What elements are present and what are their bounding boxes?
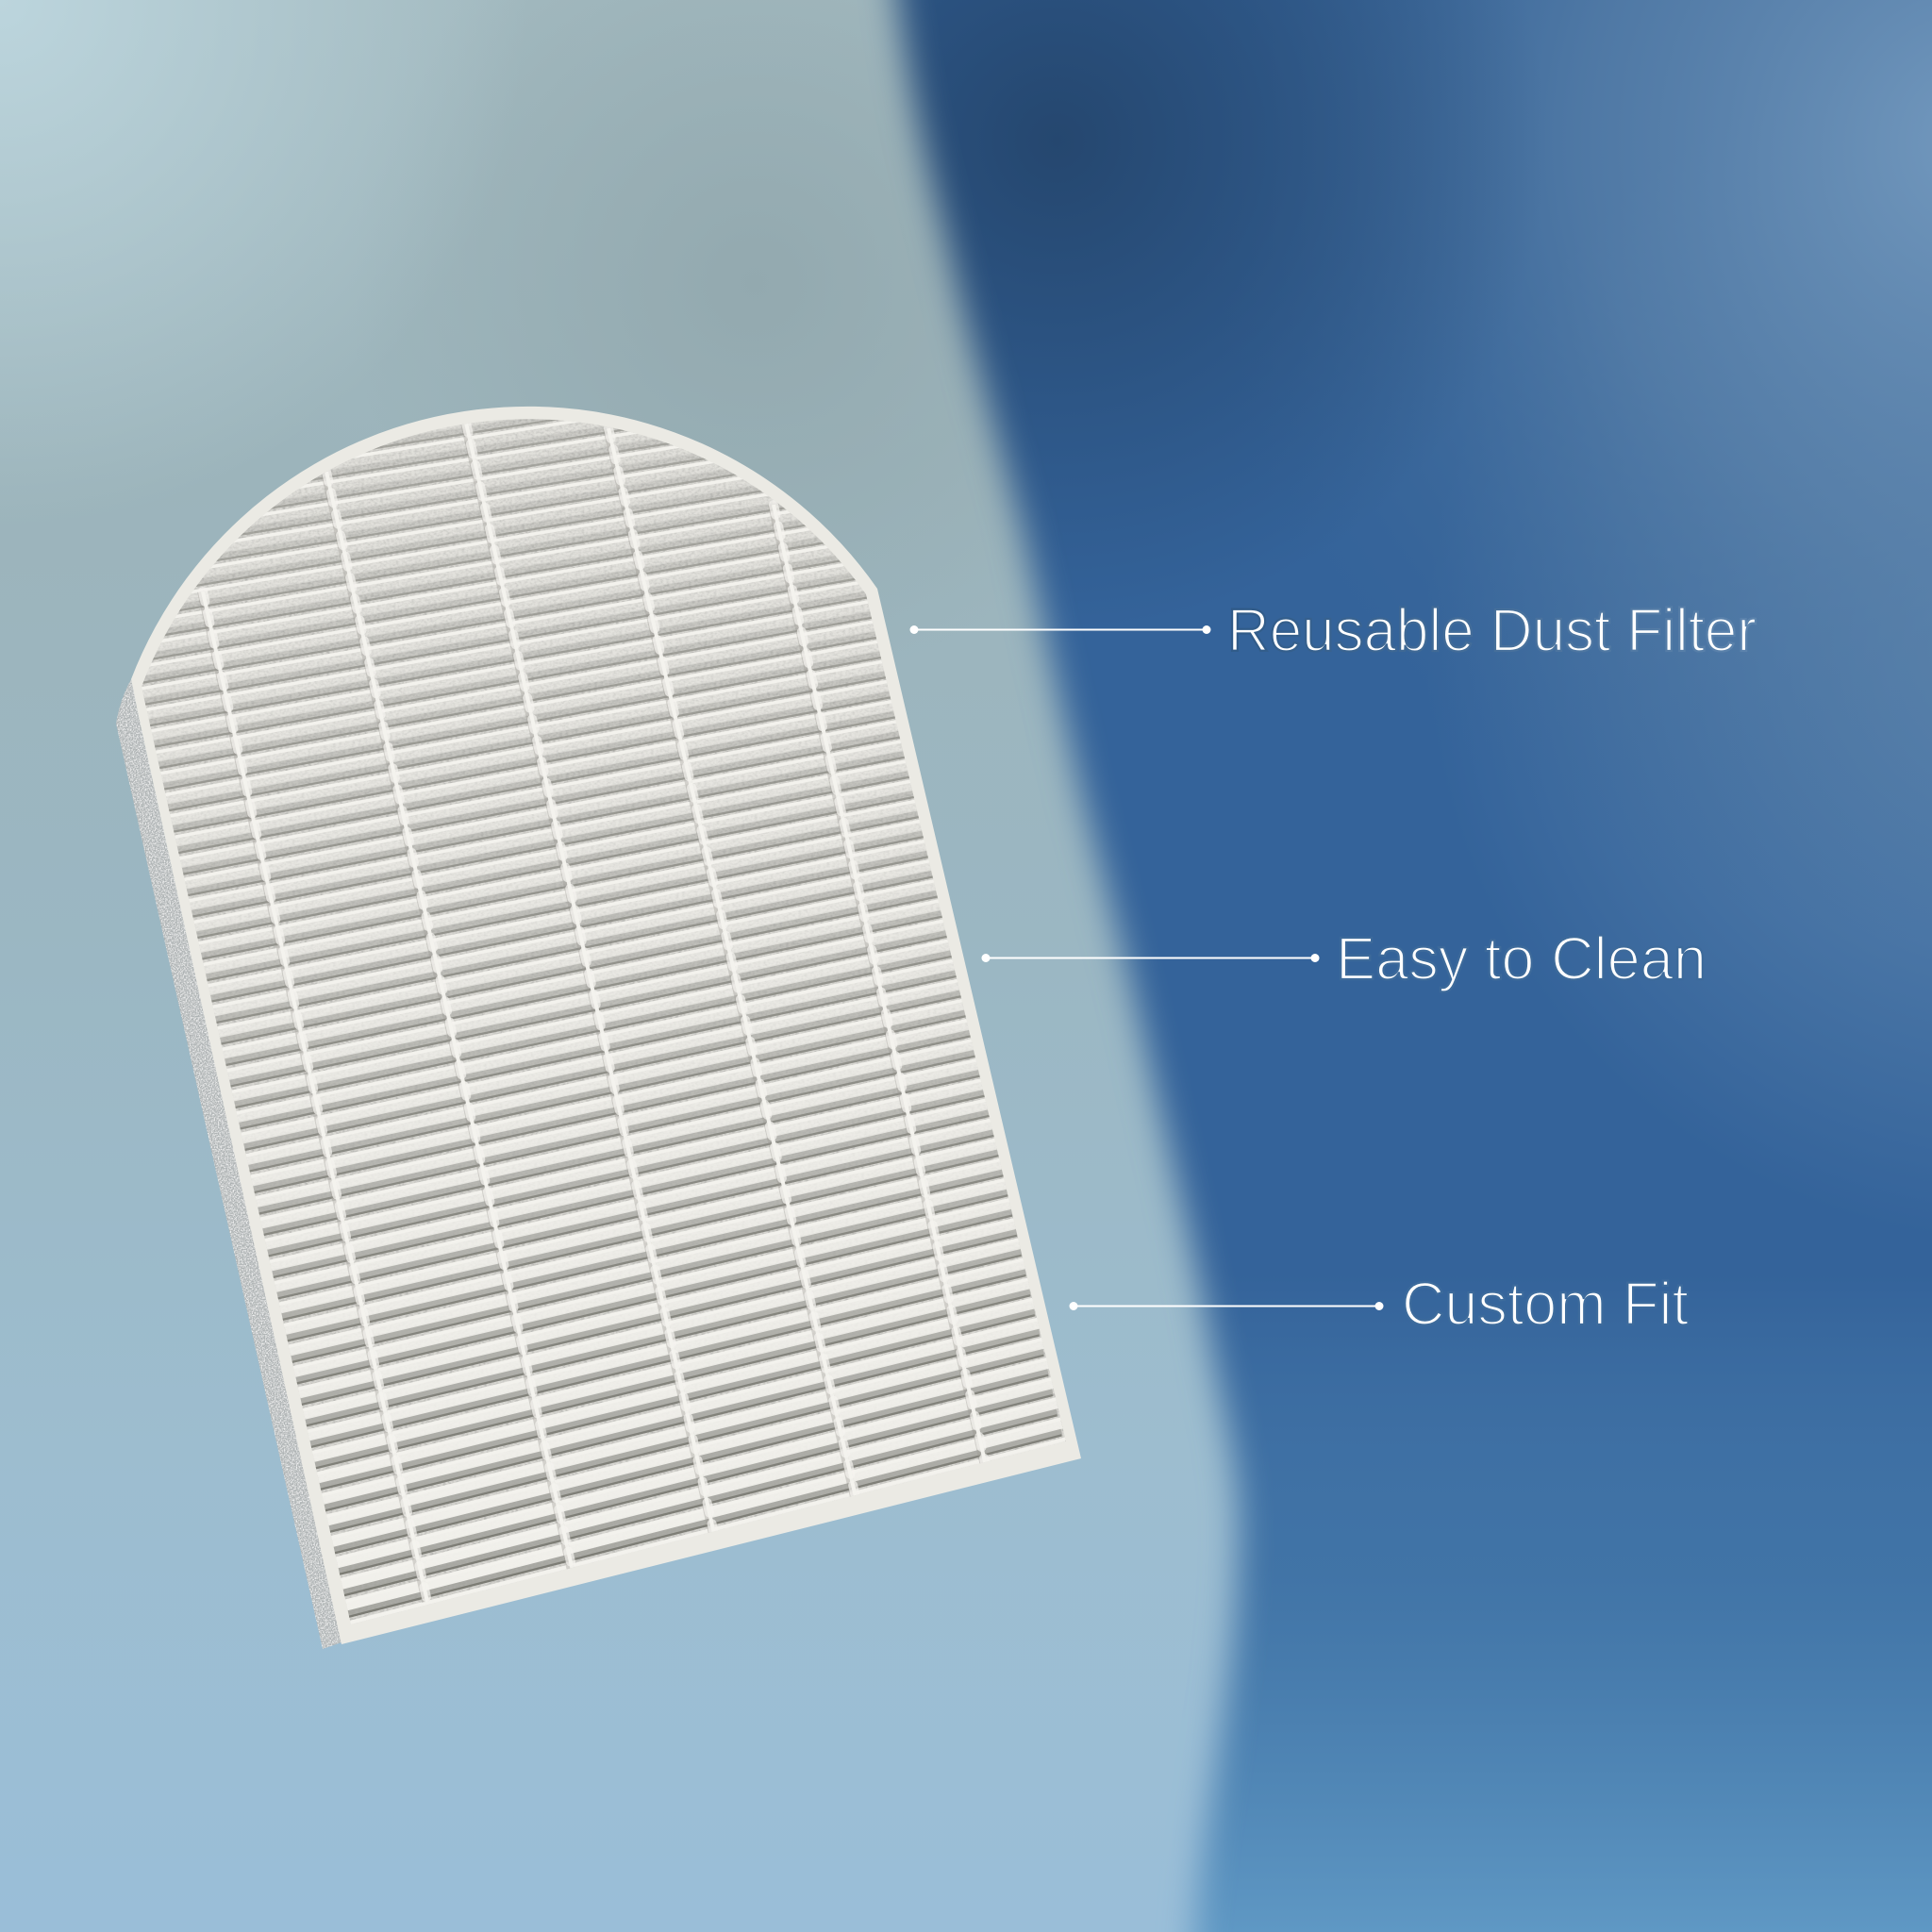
dust filter product xyxy=(87,360,1094,1651)
filter support ribs xyxy=(201,423,986,1602)
label: Reusable Dust Filter: Reusable Dust Filter xyxy=(1227,596,1757,664)
callout: Easy to Clean xyxy=(981,924,1707,992)
callout: Reusable Dust Filter xyxy=(909,596,1757,664)
filter pleated slats xyxy=(142,419,1066,1624)
label: Custom Fit: Custom Fit xyxy=(1402,1270,1689,1338)
callout: Custom Fit xyxy=(1070,1270,1689,1338)
background: pale teal curved left panel xyxy=(0,0,1260,1932)
label: Easy to Clean: Easy to Clean xyxy=(1336,924,1707,992)
filter white outer frame xyxy=(131,407,1081,1644)
filter side edge xyxy=(116,679,341,1649)
